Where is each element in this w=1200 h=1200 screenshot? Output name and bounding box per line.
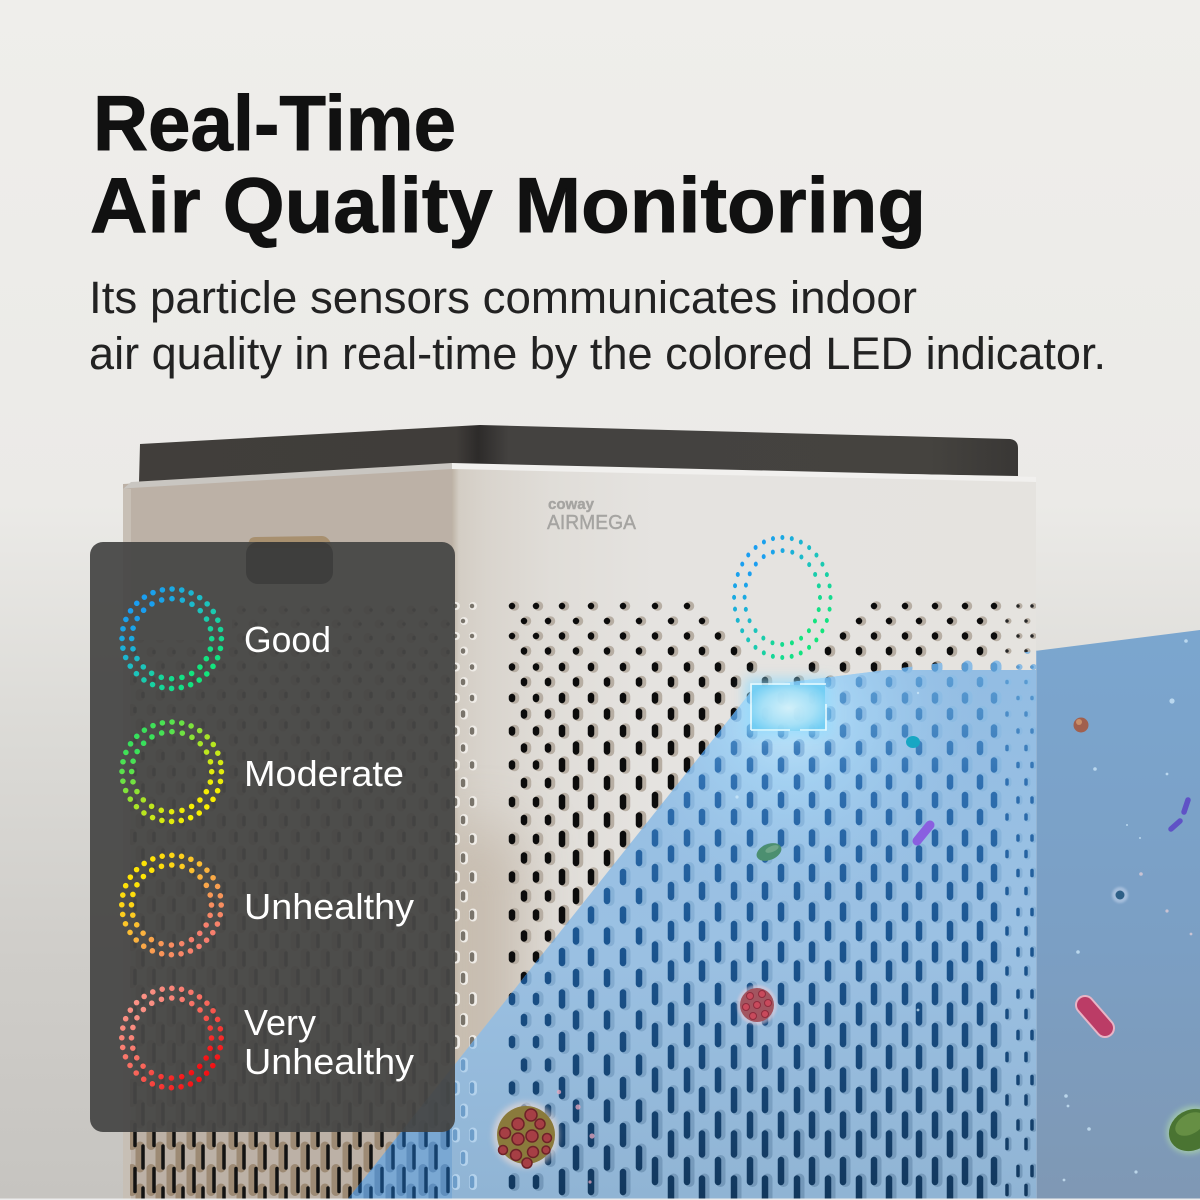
brand logo: AIRMEGA (547, 512, 637, 534)
ring: moderate (122, 722, 221, 821)
particle: red virus (737, 985, 777, 1025)
sensor light box (745, 678, 831, 736)
particle: small spiky virus (1112, 887, 1128, 903)
label: unhealthy: Unhealthy (244, 886, 414, 927)
subtitle: Its particle sensors communicates indoor (89, 272, 917, 323)
particle: purple bacillus (917, 825, 930, 841)
purifier side face (123, 464, 452, 1200)
side handle (246, 536, 333, 548)
particle: small purple rods (1171, 800, 1188, 829)
air purifier (123, 425, 1036, 1200)
LED indicator ring on purifier (734, 537, 830, 658)
label: good: Good (244, 619, 331, 660)
label: very unhealthy: Very (244, 1002, 316, 1043)
subtitle (89, 272, 1106, 379)
title: Air Quality Monitoring (90, 161, 926, 249)
purifier lid (139, 425, 1018, 482)
purifier front face (452, 464, 1036, 1200)
particle: green leaf spore (754, 840, 784, 864)
ring: good (122, 589, 221, 688)
particle: large coronavirus (493, 1102, 559, 1168)
title (90, 79, 926, 249)
label: moderate: Moderate (244, 753, 404, 794)
brand logo: coway (548, 496, 595, 513)
particle: brown spore (1074, 718, 1088, 732)
particle: green mould (1158, 1097, 1200, 1163)
label: very unhealthy (244, 1002, 414, 1082)
brand logo (547, 496, 637, 534)
sensor beam: blue air zone (348, 630, 1200, 1198)
panel: air quality legend (90, 542, 455, 1132)
ring: unhealthy (122, 855, 221, 955)
side perforations (132, 610, 448, 1200)
front perforations (508, 601, 1036, 997)
title: Real-Time (93, 79, 456, 167)
particle: red bacillus (1085, 1005, 1105, 1028)
floating dust specks (557, 639, 1192, 1184)
subtitle: air quality in real-time by the colored LED indicator. (89, 328, 1106, 379)
corner perforations (455, 606, 473, 1200)
ring: very unhealthy (122, 988, 221, 1088)
label: very unhealthy: Unhealthy (244, 1041, 414, 1082)
legend background (90, 542, 455, 1132)
particle: teal blob (906, 736, 920, 748)
